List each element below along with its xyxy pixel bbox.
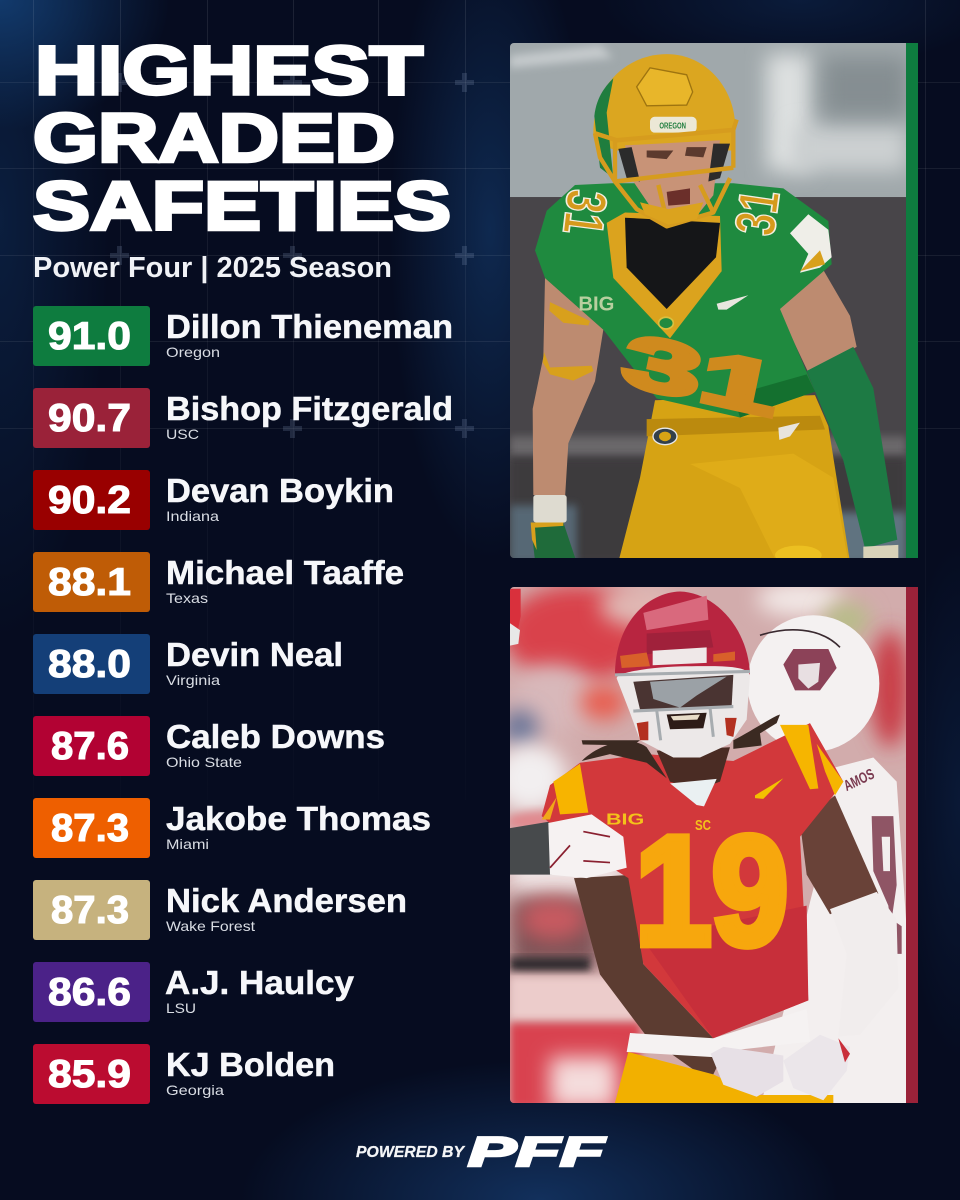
helmet — [615, 592, 750, 675]
row: Michael Taaffe — [33, 552, 404, 612]
ranking list — [33, 306, 453, 1104]
row: Caleb Downs: 87.6 — [51, 725, 129, 768]
row: KJ Bolden: 85.9 — [48, 1053, 131, 1096]
row: Bishop Fitzgerald — [33, 388, 453, 448]
jersey numbers: 31 — [550, 186, 618, 239]
row: Devin Neal: 88.0 — [48, 643, 131, 686]
panel: Oregon player photo — [510, 40, 918, 565]
row: Devan Boykin — [33, 470, 394, 530]
jersey — [535, 183, 832, 417]
jersey number 19: 19 — [635, 805, 788, 978]
face cage and chin — [617, 666, 750, 758]
row: Devin Neal — [33, 634, 343, 694]
title: HIGHEST — [35, 32, 423, 109]
title: SAFETIES — [33, 168, 451, 244]
row: Devan Boykin: Devan Boykin — [166, 472, 394, 509]
green sleeve — [807, 347, 897, 548]
row: Caleb Downs — [33, 716, 385, 776]
row: Bishop Fitzgerald: 90.7 — [48, 397, 131, 440]
stadium background — [510, 40, 907, 564]
hands — [711, 1047, 783, 1097]
row: Jakobe Thomas: Jakobe Thomas — [166, 800, 431, 837]
panel: Oregon player photo: BIG — [578, 293, 614, 316]
row: Dillon Thieneman — [33, 306, 453, 366]
crowd background — [493, 582, 910, 1109]
jersey numbers — [550, 186, 792, 239]
row: Devin Neal: Devin Neal — [166, 636, 343, 673]
footer: powered by PFF: PFF — [468, 1128, 606, 1175]
row: Nick Andersen: Nick Andersen — [166, 882, 407, 919]
row: Jakobe Thomas: Miami — [166, 836, 209, 852]
panel: Oregon player photo: 31 — [616, 318, 786, 433]
opposing player — [747, 615, 906, 1109]
row: A.J. Haulcy: 86.6 — [48, 971, 131, 1014]
row: Dillon Thieneman: Oregon — [166, 344, 220, 360]
facemask — [595, 120, 737, 226]
title — [33, 32, 451, 244]
footer: powered by PFF: POWERED BY — [356, 1144, 465, 1161]
panel: Oregon player photo: OREGON — [659, 121, 686, 131]
row: Nick Andersen — [33, 880, 407, 940]
panel: USC player photo: SC — [695, 818, 711, 834]
row: Caleb Downs: Ohio State — [166, 754, 242, 770]
row: Caleb Downs: Caleb Downs — [166, 718, 385, 755]
row: Dillon Thieneman: Dillon Thieneman — [166, 308, 453, 345]
row: Jakobe Thomas — [33, 798, 431, 858]
row: Bishop Fitzgerald: Bishop Fitzgerald — [166, 390, 453, 427]
row: Dillon Thieneman: 91.0 — [48, 315, 131, 358]
subtitle: Power Four | 2025 Season — [33, 252, 392, 284]
arm of teammate — [510, 821, 552, 875]
row: Nick Andersen: Wake Forest — [166, 918, 255, 934]
team color bar — [906, 587, 918, 1103]
collar and undershirt — [670, 779, 717, 806]
footer: powered by PFF — [356, 1128, 606, 1175]
row: Jakobe Thomas: 87.3 — [51, 807, 129, 850]
helmet — [593, 54, 735, 151]
jersey — [542, 723, 843, 1038]
opposing player: AMOS — [842, 766, 877, 795]
player arms — [800, 795, 878, 914]
pants — [614, 1052, 834, 1103]
row: Devin Neal: Virginia — [166, 672, 220, 688]
pants — [618, 395, 850, 562]
row: Nick Andersen: 87.3 — [51, 889, 129, 932]
row: Bishop Fitzgerald: USC — [166, 426, 199, 442]
neck — [656, 747, 730, 784]
row: Michael Taaffe: Texas — [166, 590, 208, 606]
glove on shoulder — [548, 814, 627, 878]
face — [625, 140, 720, 216]
arms — [533, 264, 857, 498]
row: KJ Bolden: KJ Bolden — [166, 1046, 335, 1083]
row: KJ Bolden — [33, 1044, 335, 1104]
team color bar — [906, 43, 918, 558]
jersey numbers: 31 — [724, 186, 792, 239]
row: A.J. Haulcy — [33, 962, 355, 1022]
dreadlocks — [582, 740, 667, 778]
panel: USC player photo — [493, 582, 918, 1109]
neck and collar — [607, 213, 722, 338]
row: A.J. Haulcy: A.J. Haulcy — [165, 964, 355, 1001]
row: KJ Bolden: Georgia — [166, 1082, 224, 1098]
panel: USC player photo: BIG — [606, 811, 644, 829]
title: GRADED — [33, 100, 395, 176]
white sleeve and shirt — [830, 892, 898, 954]
eagle shoulder logo — [790, 214, 832, 273]
row: Michael Taaffe: 88.1 — [48, 561, 131, 604]
row: Devan Boykin: 90.2 — [48, 479, 131, 522]
row: Devan Boykin: Indiana — [166, 508, 219, 524]
row: Michael Taaffe: Michael Taaffe — [166, 554, 404, 591]
row: A.J. Haulcy: LSU — [166, 1000, 196, 1016]
